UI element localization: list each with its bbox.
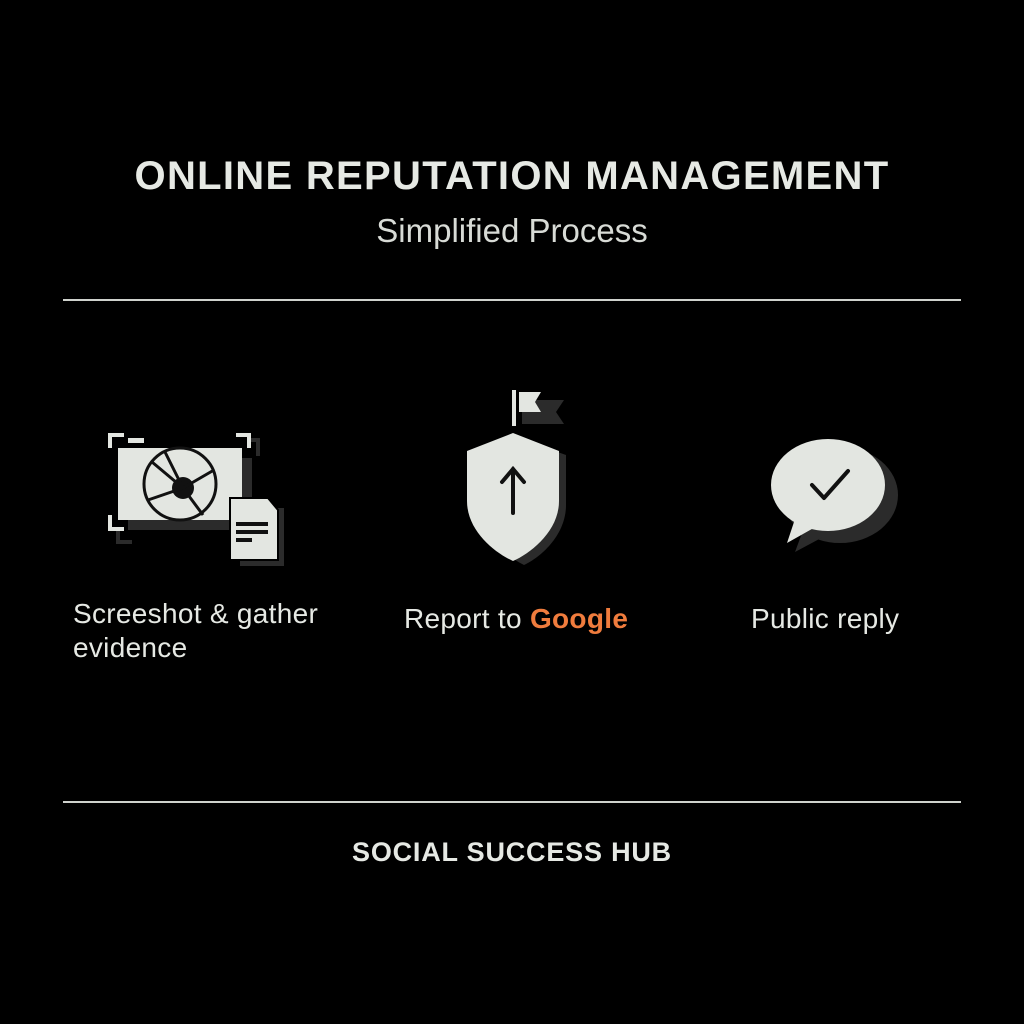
title: ONLINE REPUTATION MANAGEMENT [135, 154, 889, 198]
caption: step 1: Screeshot & gather [73, 598, 318, 629]
caption: step 1: evidence [73, 632, 187, 663]
icon: shield with flag [467, 390, 566, 565]
caption: step 1 [73, 598, 318, 663]
caption: step 2: Report to Google [404, 603, 628, 634]
caption: step 3: Public reply [751, 603, 899, 634]
icon: chat bubble with check [771, 439, 898, 552]
icon: camera with document [108, 433, 284, 566]
footer: SOCIAL SUCCESS HUB [352, 837, 672, 867]
subtitle: Simplified Process [376, 212, 648, 249]
